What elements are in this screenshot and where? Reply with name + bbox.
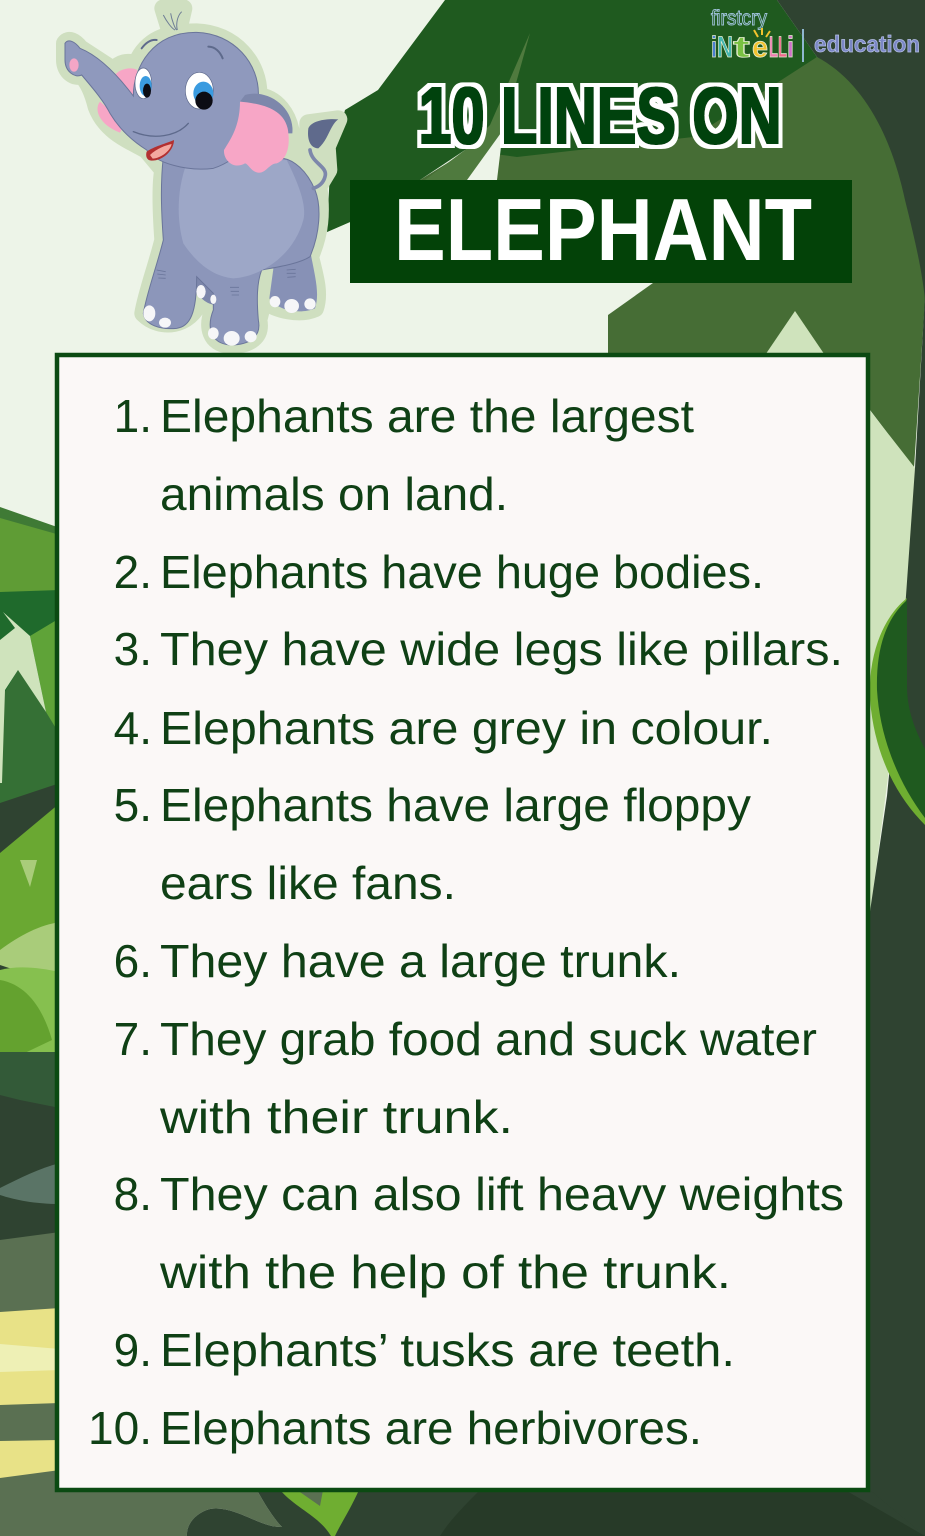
background: right dark column	[868, 295, 925, 1536]
logo: intelli: e	[752, 31, 768, 64]
line 2: Elephants have huge bodies.	[160, 546, 764, 598]
trunk tip pink	[69, 58, 79, 72]
elephant back ear	[97, 68, 137, 133]
elephant tail	[308, 119, 338, 188]
line 10: Elephants are herbivores.	[160, 1402, 702, 1454]
background: right crescent light	[870, 598, 925, 825]
line 4: 4.	[114, 702, 152, 754]
logo: education: education	[814, 31, 920, 57]
leg wrinkles	[157, 269, 296, 295]
line 6: They have a large trunk.	[160, 935, 681, 987]
eyebrows	[142, 40, 223, 58]
line 8	[114, 1168, 844, 1298]
elephant halo	[65, 8, 338, 345]
mouth	[146, 140, 174, 161]
line 7: with their trunk.	[159, 1091, 513, 1143]
line 5: Elephants have large floppy	[160, 779, 751, 831]
line 8: They can also lift heavy weights	[160, 1168, 844, 1220]
background: right pale leaf	[868, 408, 915, 930]
line 1	[114, 390, 694, 520]
background: right crescent dark	[877, 600, 925, 818]
left eye	[135, 68, 152, 99]
hair tuft	[163, 12, 182, 30]
right eye	[185, 72, 213, 110]
line 4: Elephants are grey in colour.	[160, 702, 773, 754]
background: pale wedge behind title	[467, 130, 503, 180]
tongue	[150, 144, 172, 159]
elephant near left leg and body	[143, 157, 319, 345]
line 3: They have wide legs like pillars.	[160, 623, 843, 675]
smile	[133, 123, 188, 136]
line 6: 6.	[114, 935, 152, 987]
line 5: 5.	[114, 779, 152, 831]
line 7: They grab food and suck water	[160, 1013, 817, 1065]
background: leaf streak	[425, 33, 530, 180]
background: medium green leaf	[327, 57, 925, 468]
elephant back leg	[197, 273, 217, 305]
line 3: 3.	[114, 623, 152, 675]
line 10: 10.	[88, 1402, 152, 1454]
line 5: ears like fans.	[160, 857, 456, 909]
logo: intelli: L	[778, 31, 787, 64]
logo: intelli: t	[733, 31, 750, 64]
line 1: animals on land.	[160, 468, 508, 520]
line 9: 9.	[114, 1324, 152, 1376]
logo: intelli: L	[769, 31, 778, 64]
elephant head and trunk	[65, 32, 259, 169]
background: pale triangle at panel top	[755, 311, 835, 370]
line 1: Elephants are the largest	[160, 390, 694, 442]
elephant belly	[179, 160, 304, 278]
elephant illustration	[65, 8, 338, 346]
line 1: 1.	[114, 390, 152, 442]
logo	[711, 7, 920, 64]
background: bottom strip	[0, 1490, 925, 1536]
panel: ten lines list	[57, 355, 868, 1490]
logo: sun rays	[754, 28, 770, 37]
background: left foliage bands	[0, 507, 60, 1536]
elephant far right leg	[269, 250, 317, 311]
logo: divider	[802, 29, 804, 62]
logo: intelli: i	[787, 31, 794, 64]
toenails	[143, 285, 316, 346]
line 8: 8.	[114, 1168, 152, 1220]
front ear	[224, 94, 293, 173]
line 8: with the help of the trunk.	[159, 1246, 731, 1298]
title: 10 lines on: 10 LINES ON	[418, 71, 782, 160]
line 2: 2.	[114, 546, 152, 598]
line 5	[114, 779, 751, 909]
logo: intelli	[711, 31, 794, 64]
background: top-right dark shape	[777, 0, 925, 300]
logo: intelli: N	[717, 31, 733, 64]
logo: intelli: i	[711, 31, 717, 64]
background: dark green leaf	[327, 0, 817, 232]
line 9: Elephants’ tusks are teeth.	[160, 1324, 735, 1376]
line 7: 7.	[114, 1013, 152, 1065]
title banner: elephant: ELEPHANT	[394, 180, 812, 279]
line 7	[114, 1013, 817, 1143]
logo: firstcry: firstcry	[711, 7, 767, 30]
